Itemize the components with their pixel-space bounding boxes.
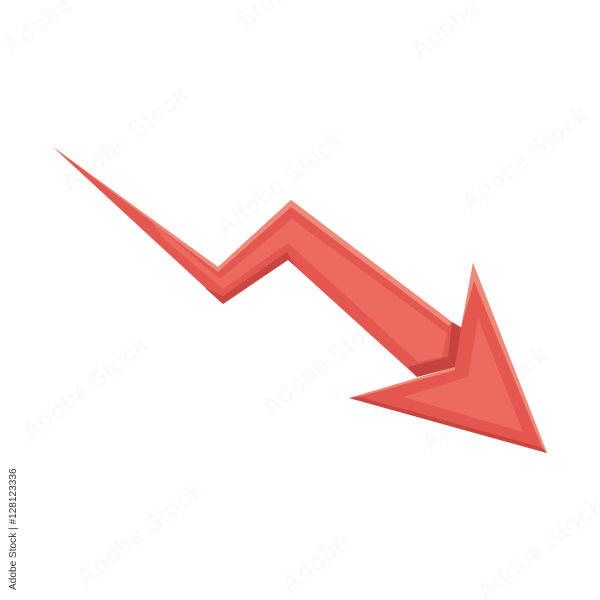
watermark: repeated Adobe Stock pattern: Adobe Stock	[71, 476, 209, 592]
vertical stock credit text: Adobe Stock | #128123336	[8, 468, 19, 590]
arrow head	[349, 263, 547, 453]
arrow shaft end shadow	[408, 322, 462, 377]
watermark: repeated Adobe Stock pattern: Adobe Stock	[256, 306, 394, 422]
watermark: repeated Adobe Stock pattern: Adobe Stock	[211, 126, 349, 242]
watermark: repeated Adobe Stock pattern: Adobe Stock	[16, 331, 154, 447]
watermark: repeated Adobe Stock pattern: Adobe Stock	[456, 101, 594, 217]
watermark: repeated Adobe Stock pattern: Adobe	[276, 529, 354, 599]
arrow shaft	[53, 147, 462, 377]
watermark: repeated Adobe Stock pattern: Adobe Stock	[416, 341, 554, 457]
watermark: repeated Adobe Stock pattern: Adobe Stock	[56, 81, 194, 197]
down trend arrow	[53, 147, 547, 453]
